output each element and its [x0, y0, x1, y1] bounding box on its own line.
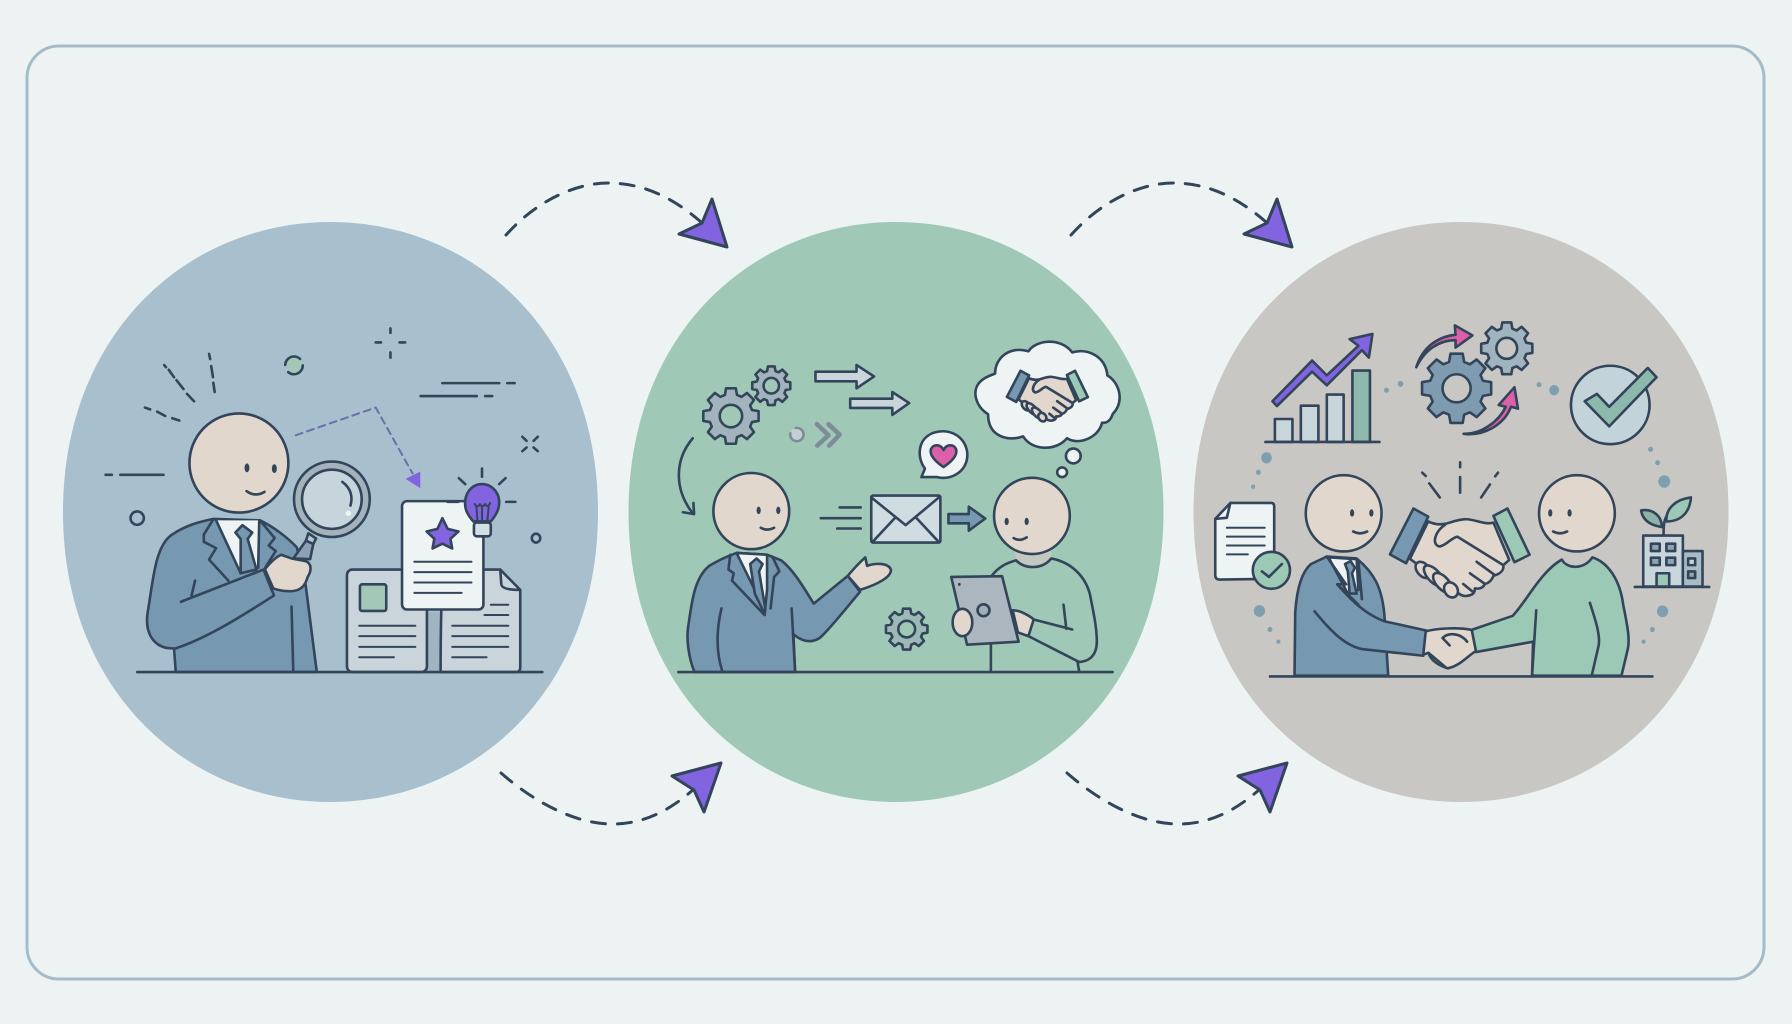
icon: light bulb [448, 469, 515, 536]
dashed route to document [296, 408, 420, 488]
document stack [347, 570, 520, 672]
icon: lower gear [886, 609, 927, 650]
panel: discovery background circle [63, 222, 598, 802]
arrow: bottom arrow from circle 2 to circle 3 [1067, 763, 1287, 824]
thought cloud with handshake [975, 342, 1120, 477]
person: colleague with tablet [951, 478, 1097, 672]
icon: approved document [1215, 503, 1290, 589]
person: head [189, 413, 288, 513]
hand [265, 555, 311, 591]
spark lines above handshake [1422, 462, 1498, 497]
gears with pink arrows [1416, 322, 1532, 434]
icon: large gear [703, 388, 759, 444]
icon: green building with plant [1635, 497, 1709, 587]
block arrows [815, 365, 909, 415]
clasped hands of the two partners [1423, 628, 1476, 668]
arrow: top arrow from circle 1 to circle 2 [506, 183, 727, 247]
panel: partnership background circle [1194, 222, 1728, 802]
icon: envelope with speed lines [821, 496, 940, 543]
front document with star [402, 501, 483, 610]
arrow to recipient [948, 507, 985, 531]
illustration: two people exchanging messages [678, 342, 1120, 672]
arrow: bottom arrow from circle 1 to circle 2 [501, 763, 721, 824]
illustration: researcher with magnifying glass [106, 328, 542, 672]
icon: check mark circle [1571, 366, 1657, 444]
person: green sweater partner [1472, 475, 1629, 676]
person: suit partner [1295, 475, 1427, 676]
magnifying glass [293, 462, 370, 559]
person: suit body [147, 519, 317, 672]
bar chart with rising arrow [1265, 334, 1379, 442]
ground line [137, 671, 542, 673]
icon: small gear [752, 366, 790, 405]
panel: engagement background circle [628, 222, 1164, 802]
ground line [678, 671, 1113, 673]
orbit dots [1251, 381, 1670, 644]
person: presenter in suit [688, 473, 891, 672]
arrow: top arrow from circle 2 to circle 3 [1071, 183, 1292, 247]
spark lines and floating marks [106, 328, 540, 543]
curved arrow [679, 438, 694, 514]
ground line [1270, 675, 1652, 678]
large handshake icon [1390, 509, 1530, 600]
speech bubble with heart [920, 431, 967, 478]
illustration: partners shaking hands [1215, 322, 1709, 676]
chevrons [790, 424, 840, 446]
